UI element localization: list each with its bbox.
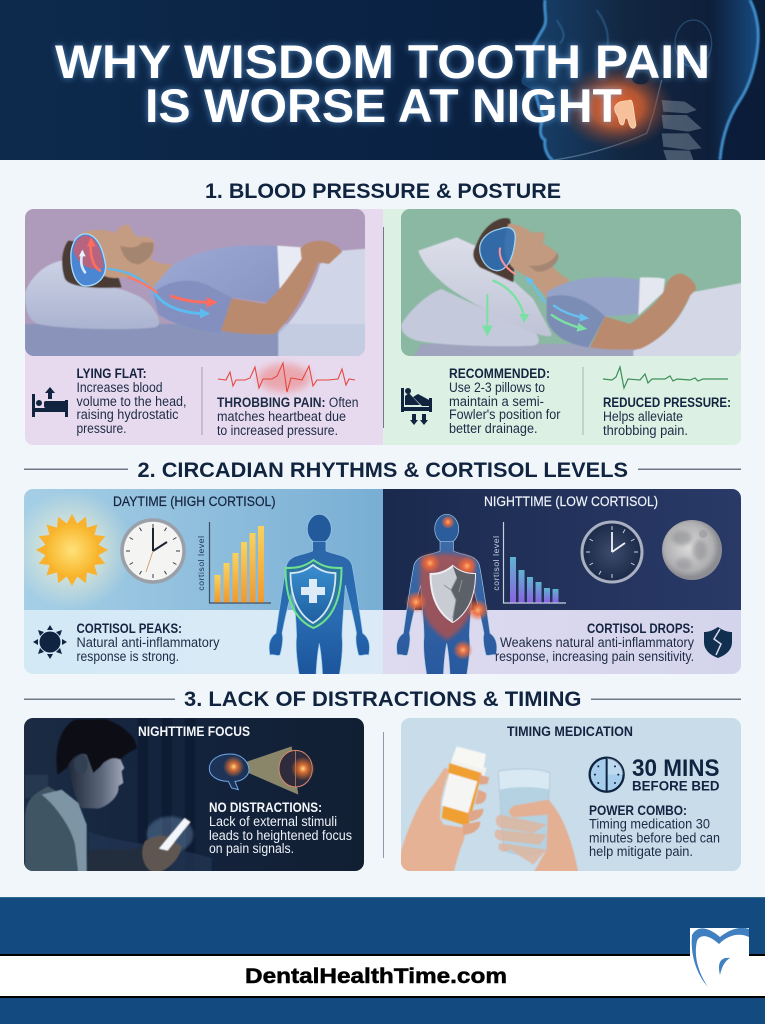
website url: DentalHealthTime.com bbox=[245, 965, 507, 988]
illustration: man looking at phone bbox=[25, 718, 212, 873]
text: no distractions: leads to heightened focus bbox=[209, 828, 352, 843]
text: no distractions: Lack of external stimuli bbox=[209, 814, 337, 829]
text: cortisol peaks: CORTISOL PEAKS: bbox=[76, 621, 182, 636]
text: recommended: Fowler's position for bbox=[449, 407, 561, 422]
text: recommended: better drainage. bbox=[449, 421, 538, 436]
text: throbbing pain: matches heartbeat due bbox=[217, 409, 346, 424]
icon: stopwatch clock bbox=[590, 758, 624, 792]
chart: high cortisol bars bbox=[196, 522, 271, 603]
text: 30 mins before bed: BEFORE BED bbox=[632, 778, 720, 794]
text: recommended: maintain a semi- bbox=[449, 394, 544, 409]
title: WHY WISDOM TOOTH PAIN bbox=[55, 35, 710, 88]
illustration: body with protective shield bbox=[269, 514, 369, 675]
heading: section 1: 1. BLOOD PRESSURE & POSTURE bbox=[205, 180, 561, 203]
text: reduced pressure: REDUCED PRESSURE: bbox=[603, 395, 731, 410]
chart: red heartbeat line bbox=[218, 363, 355, 392]
panel: daytime bbox=[12, 489, 383, 675]
text: lying flat: volume to the head, bbox=[76, 394, 186, 409]
text: lying flat: Increases blood bbox=[76, 380, 162, 395]
panel: nighttime bbox=[383, 489, 741, 675]
heading: nighttime focus: NIGHTTIME FOCUS bbox=[138, 724, 250, 739]
text: cortisol drops bbox=[495, 621, 694, 664]
text: power combo: help mitigate pain. bbox=[589, 844, 693, 859]
illustration: man propped on pillows with drainage arrows bbox=[401, 209, 745, 359]
icon: full moon bbox=[662, 520, 722, 580]
icon: anatomical head with glowing jaw bbox=[521, 0, 758, 160]
header banner bbox=[0, 0, 765, 160]
text: reduced pressure: throbbing pain. bbox=[603, 423, 688, 438]
panel: timing medication bbox=[400, 718, 741, 873]
title bbox=[52, 40, 712, 127]
text: throbbing pain: to increased pressure. bbox=[217, 423, 338, 438]
illustration: hand holding glass of water bbox=[495, 769, 578, 873]
text: power combo bbox=[589, 803, 720, 859]
text: throbbing pain: THROBBING PAIN: Often bbox=[217, 395, 358, 410]
text: throbbing pain bbox=[217, 395, 358, 438]
panel: circadian rhythms bbox=[12, 489, 741, 675]
text: lying flat: raising hydrostatic bbox=[76, 407, 179, 422]
chart: low cortisol bars bbox=[491, 522, 566, 603]
text: power combo: Timing medication 30 bbox=[589, 816, 710, 832]
heading: timing medication: TIMING MEDICATION bbox=[507, 724, 633, 739]
text: reduced pressure: Helps alleviate bbox=[603, 409, 683, 424]
icon: day clock bbox=[122, 520, 184, 582]
panel: lying flat bbox=[25, 209, 383, 445]
title: IS WORSE AT NIGHT bbox=[145, 79, 622, 132]
text: recommended bbox=[449, 366, 561, 436]
icon: inclined bed with down arrows bbox=[401, 388, 432, 425]
text: cortisol drops: response, increasing pain sensitivity. bbox=[495, 649, 694, 664]
text: reduced pressure bbox=[603, 395, 731, 438]
text: recommended: RECOMMENDED: bbox=[449, 366, 550, 381]
icon: flat bed with up arrow bbox=[32, 387, 68, 417]
text: cortisol peaks: Natural anti-inflammatory bbox=[76, 635, 220, 650]
text: no distractions bbox=[209, 800, 352, 856]
illustration: hand holding pill bottle bbox=[400, 746, 489, 873]
text: power combo: minutes before bed can bbox=[589, 830, 720, 846]
label: daytime: DAYTIME (HIGH CORTISOL) bbox=[113, 494, 276, 509]
icon: tooth logo bbox=[690, 928, 749, 987]
text: cortisol peaks: response is strong. bbox=[76, 649, 179, 664]
icon: sun bbox=[24, 496, 124, 604]
text: 30 mins before bed bbox=[632, 759, 719, 790]
icon: broken shield bbox=[704, 627, 732, 658]
chart: high cortisol bars: cortisol level bbox=[196, 535, 206, 591]
text: power combo: POWER COMBO: bbox=[589, 803, 687, 818]
text: cortisol drops: CORTISOL DROPS: bbox=[587, 621, 694, 636]
footer band bbox=[0, 897, 765, 1024]
panel: recommended bbox=[383, 209, 745, 445]
text: no distractions: on pain signals. bbox=[209, 841, 294, 856]
chart: low cortisol bars: cortisol level bbox=[491, 535, 501, 591]
label: nighttime: NIGHTTIME (LOW CORTISOL) bbox=[484, 494, 658, 509]
text: cortisol drops: Weakens natural anti-inflammatory bbox=[500, 635, 694, 650]
illustration: body with cracked shield and inflammation bbox=[397, 514, 497, 675]
text: lying flat: pressure. bbox=[76, 421, 126, 436]
text: no distractions: NO DISTRACTIONS: bbox=[209, 800, 322, 815]
icon: dark sun bbox=[33, 625, 67, 659]
illustration: man lying flat with blood flow arrows bbox=[25, 209, 370, 357]
icon: brains with focus beam bbox=[209, 746, 315, 795]
text: cortisol peaks bbox=[76, 621, 220, 664]
panel: nighttime focus bbox=[24, 718, 364, 873]
heading: section 2: 2. CIRCADIAN RHYTHMS & CORTISOL LEVELS bbox=[138, 459, 628, 482]
text: lying flat bbox=[76, 366, 186, 436]
heading: section 3: 3. LACK OF DISTRACTIONS & TIMING bbox=[184, 688, 582, 711]
text: lying flat: LYING FLAT: bbox=[76, 366, 146, 381]
text: recommended: Use 2-3 pillows to bbox=[449, 380, 545, 395]
chart: calm green heartbeat line bbox=[603, 367, 728, 388]
text: 30 mins before bed: 30 MINS bbox=[632, 755, 720, 782]
icon: night clock bbox=[582, 522, 642, 582]
